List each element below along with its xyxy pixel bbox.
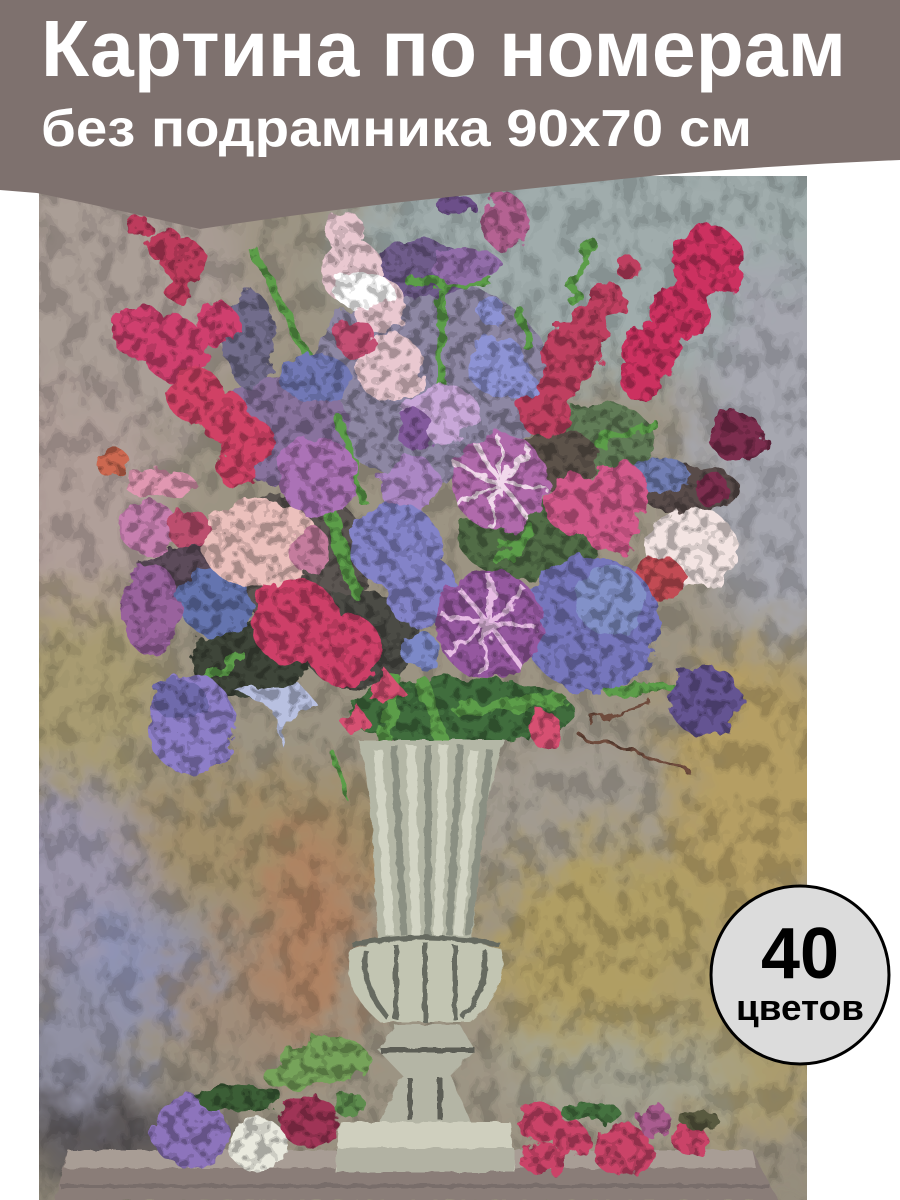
white carnation <box>636 508 738 600</box>
flower spike top left <box>126 214 207 303</box>
dark foliage behind bouquet <box>140 240 740 746</box>
left flower group <box>152 1096 228 1168</box>
vase bowl <box>348 938 503 1022</box>
pink hydrangea <box>251 578 382 687</box>
vase plinth <box>335 1122 515 1172</box>
red spike right <box>621 226 744 401</box>
bouquet <box>94 194 764 800</box>
small blue sprig <box>400 632 440 668</box>
vase <box>335 740 515 1172</box>
right purple flower <box>670 665 742 737</box>
purple top flowers <box>435 195 475 215</box>
vase stem <box>378 1025 475 1125</box>
painting <box>39 176 807 1200</box>
blue right small <box>630 457 690 493</box>
painted background wall <box>39 176 807 1200</box>
flower spike left <box>167 367 274 488</box>
header banner <box>0 0 900 229</box>
green leaves <box>262 1036 370 1089</box>
fallen flowers <box>152 1036 720 1176</box>
chrysanthemum top <box>452 434 548 530</box>
blue hyacinth <box>350 455 456 628</box>
pink peony <box>545 462 648 553</box>
left blue flower <box>179 568 251 636</box>
green leaves and stems <box>210 240 688 800</box>
dark red flower right <box>695 412 764 507</box>
pale blue sprig <box>232 684 318 745</box>
right flower group <box>516 1102 708 1176</box>
badge: 40 colours <box>711 886 889 1064</box>
title: Картина по номерам <box>41 4 846 93</box>
lower left blue flower <box>148 675 236 775</box>
pale spire <box>320 212 424 402</box>
left pink cluster <box>94 448 130 476</box>
large blue flower <box>524 557 660 693</box>
big pink flower left <box>112 303 240 382</box>
vase body <box>358 740 505 940</box>
chrysanthemum lower <box>436 571 544 679</box>
table <box>55 1150 778 1200</box>
red spike middle right <box>519 256 640 438</box>
badge: 40 colours: цветов <box>736 987 864 1028</box>
badge: 40 colours: 40 <box>761 914 839 994</box>
small pink buds <box>338 668 559 750</box>
left purple flower <box>122 564 182 656</box>
blue delphinium centre <box>467 296 536 401</box>
subtitle: без подрамника 90х70 см <box>41 100 752 158</box>
purple pompon <box>278 437 358 517</box>
white pink flower <box>202 501 322 589</box>
